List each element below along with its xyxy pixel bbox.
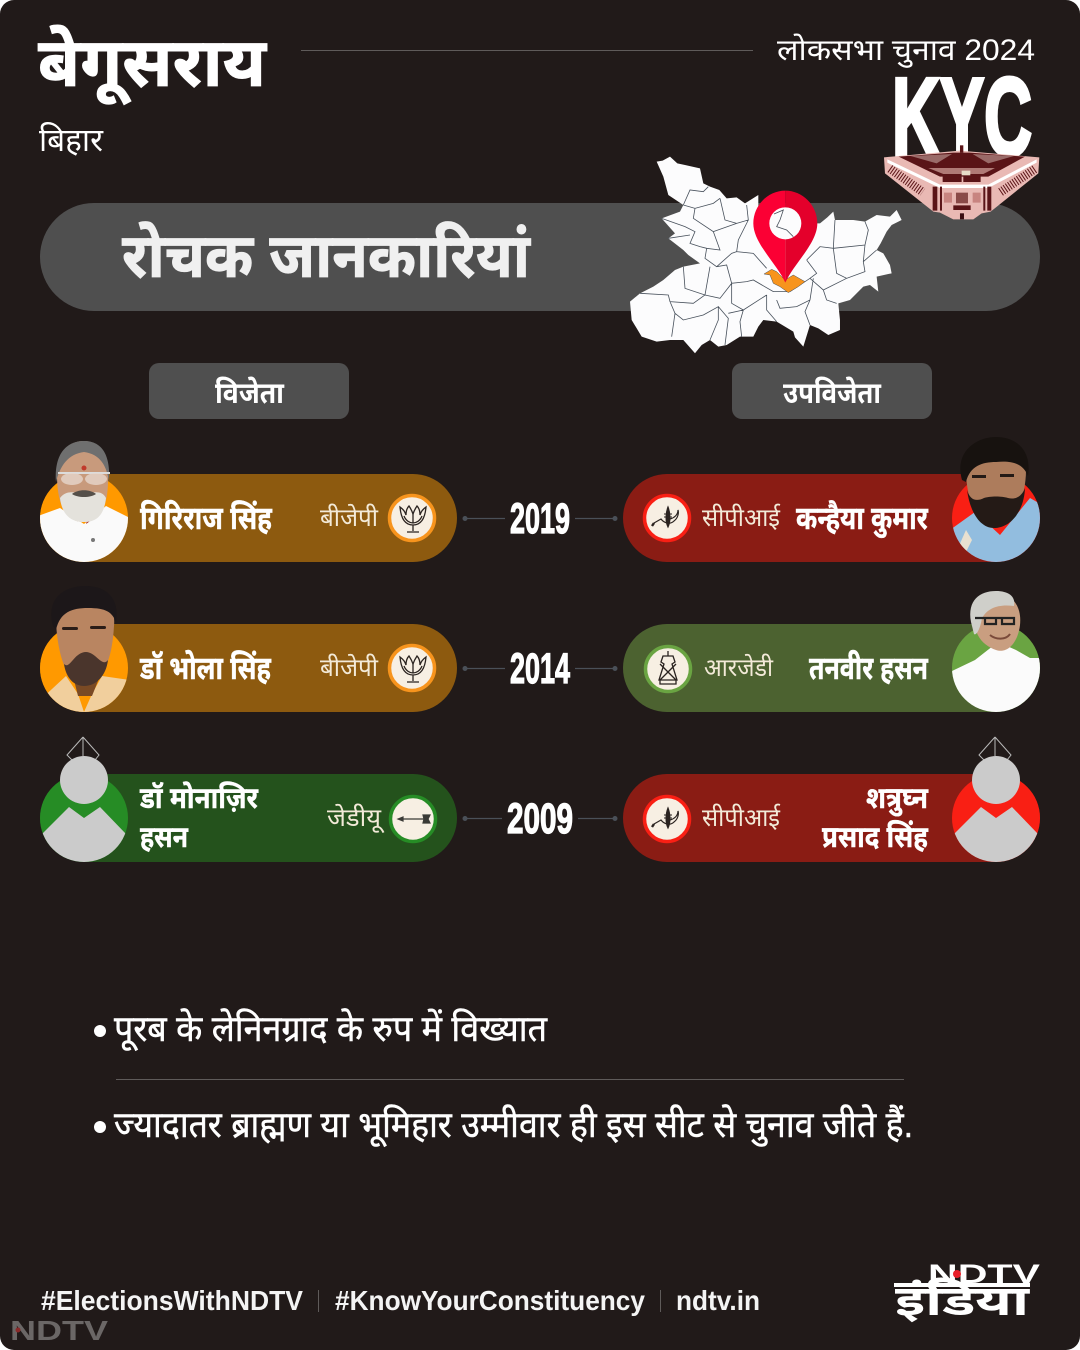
year connector 2014 <box>462 645 618 693</box>
row 2014 runner-up: तनवीर हसन <box>809 650 929 686</box>
row 2009 runner-up: शत्रुघ्न <box>866 782 928 817</box>
row 2009 winner: जेडीयू <box>327 802 385 833</box>
footer hashtags: ndtv.in <box>676 1285 760 1316</box>
row 2019 winner <box>38 441 457 565</box>
row 2019 runner-up: सीपीआई <box>702 503 781 532</box>
title: Begusarai: बेगूसराय <box>38 25 268 105</box>
NDTV India logo <box>894 1259 1040 1324</box>
row 2019 winner: बीजेपी <box>320 502 378 532</box>
subtitle: Bihar: बिहार <box>39 122 104 158</box>
row 2014 winner <box>40 608 457 712</box>
portrait: Tanveer Hassan <box>950 591 1042 715</box>
footer hashtags: #KnowYourConstituency <box>335 1285 645 1316</box>
election label: लोकसभा चुनाव 2024 <box>777 33 1035 68</box>
row 2009 winner <box>40 737 457 865</box>
row 2014 winner: बीजेपी <box>320 652 378 682</box>
year connector 2019 <box>462 495 618 543</box>
fact 1: पूरब के लेनिनग्राद के रुप में विख्यात <box>114 1008 548 1051</box>
row 2009 runner-up <box>623 737 1040 865</box>
row 2014 winner: डॉ भोला सिंह <box>139 650 272 686</box>
portrait: Giriraj Singh <box>38 441 130 565</box>
NDTV India logo: इंडिया <box>895 1277 1030 1324</box>
label: runner-up: उपविजेता <box>783 375 882 410</box>
year connector 2014: 2014 <box>510 645 570 693</box>
year connector 2019: 2019 <box>510 495 570 543</box>
label: winner: विजेता <box>215 375 285 410</box>
portrait: Kanhaiya Kumar <box>950 437 1042 565</box>
portrait: Dr Bhola Singh <box>40 608 128 712</box>
NDTV India logo: NDTV <box>928 1259 1040 1289</box>
icon: RJD lantern <box>646 646 690 692</box>
Bihar map with locator pin <box>630 157 902 353</box>
icon: BJP lotus <box>390 496 434 540</box>
icon: JDU arrow <box>390 796 436 842</box>
portrait: placeholder <box>952 737 1040 865</box>
row 2019 winner: गिरिराज सिंह <box>140 500 273 536</box>
row 2009 runner-up: प्रसाद सिंह <box>822 820 929 854</box>
portrait: placeholder <box>40 737 128 865</box>
highlighted constituency <box>764 269 805 293</box>
row 2019 runner-up <box>623 437 1042 565</box>
district boundaries <box>640 187 877 345</box>
icon: location pin <box>753 191 817 283</box>
header rule <box>301 50 753 51</box>
icon: BJP lotus <box>390 646 434 690</box>
row 2014 runner-up <box>623 591 1042 715</box>
banner heading: रोचक जानकारियां <box>122 221 532 291</box>
row 2009 winner: हसन <box>140 821 188 854</box>
fact divider <box>116 1079 904 1080</box>
fact 2: ज्यादातर ब्राह्मण या भूमिहार उम्मीवार ही इस सीट से चुनाव जीते हैं. <box>114 1104 913 1147</box>
year connector 2009: 2009 <box>507 795 573 843</box>
footer hashtags: #ElectionsWithNDTV <box>41 1285 303 1316</box>
label: winner <box>149 363 349 419</box>
icon: parliament building <box>884 145 1039 219</box>
row 2009 winner: डॉ मोनाज़िर <box>139 781 259 815</box>
icon: CPI symbol <box>644 496 690 540</box>
NDTV watermark: NDTV <box>10 1315 108 1346</box>
banner pill <box>40 203 1040 311</box>
icon: CPI symbol <box>644 796 690 842</box>
map outline <box>630 157 902 353</box>
label: runner-up <box>732 363 932 419</box>
row 2019 runner-up: कन्हैया कुमार <box>796 500 929 538</box>
row 2014 runner-up: आरजेडी <box>704 652 773 682</box>
year connector 2009 <box>462 795 618 843</box>
row 2009 runner-up: सीपीआई <box>702 803 781 832</box>
footer hashtags <box>41 1285 760 1316</box>
